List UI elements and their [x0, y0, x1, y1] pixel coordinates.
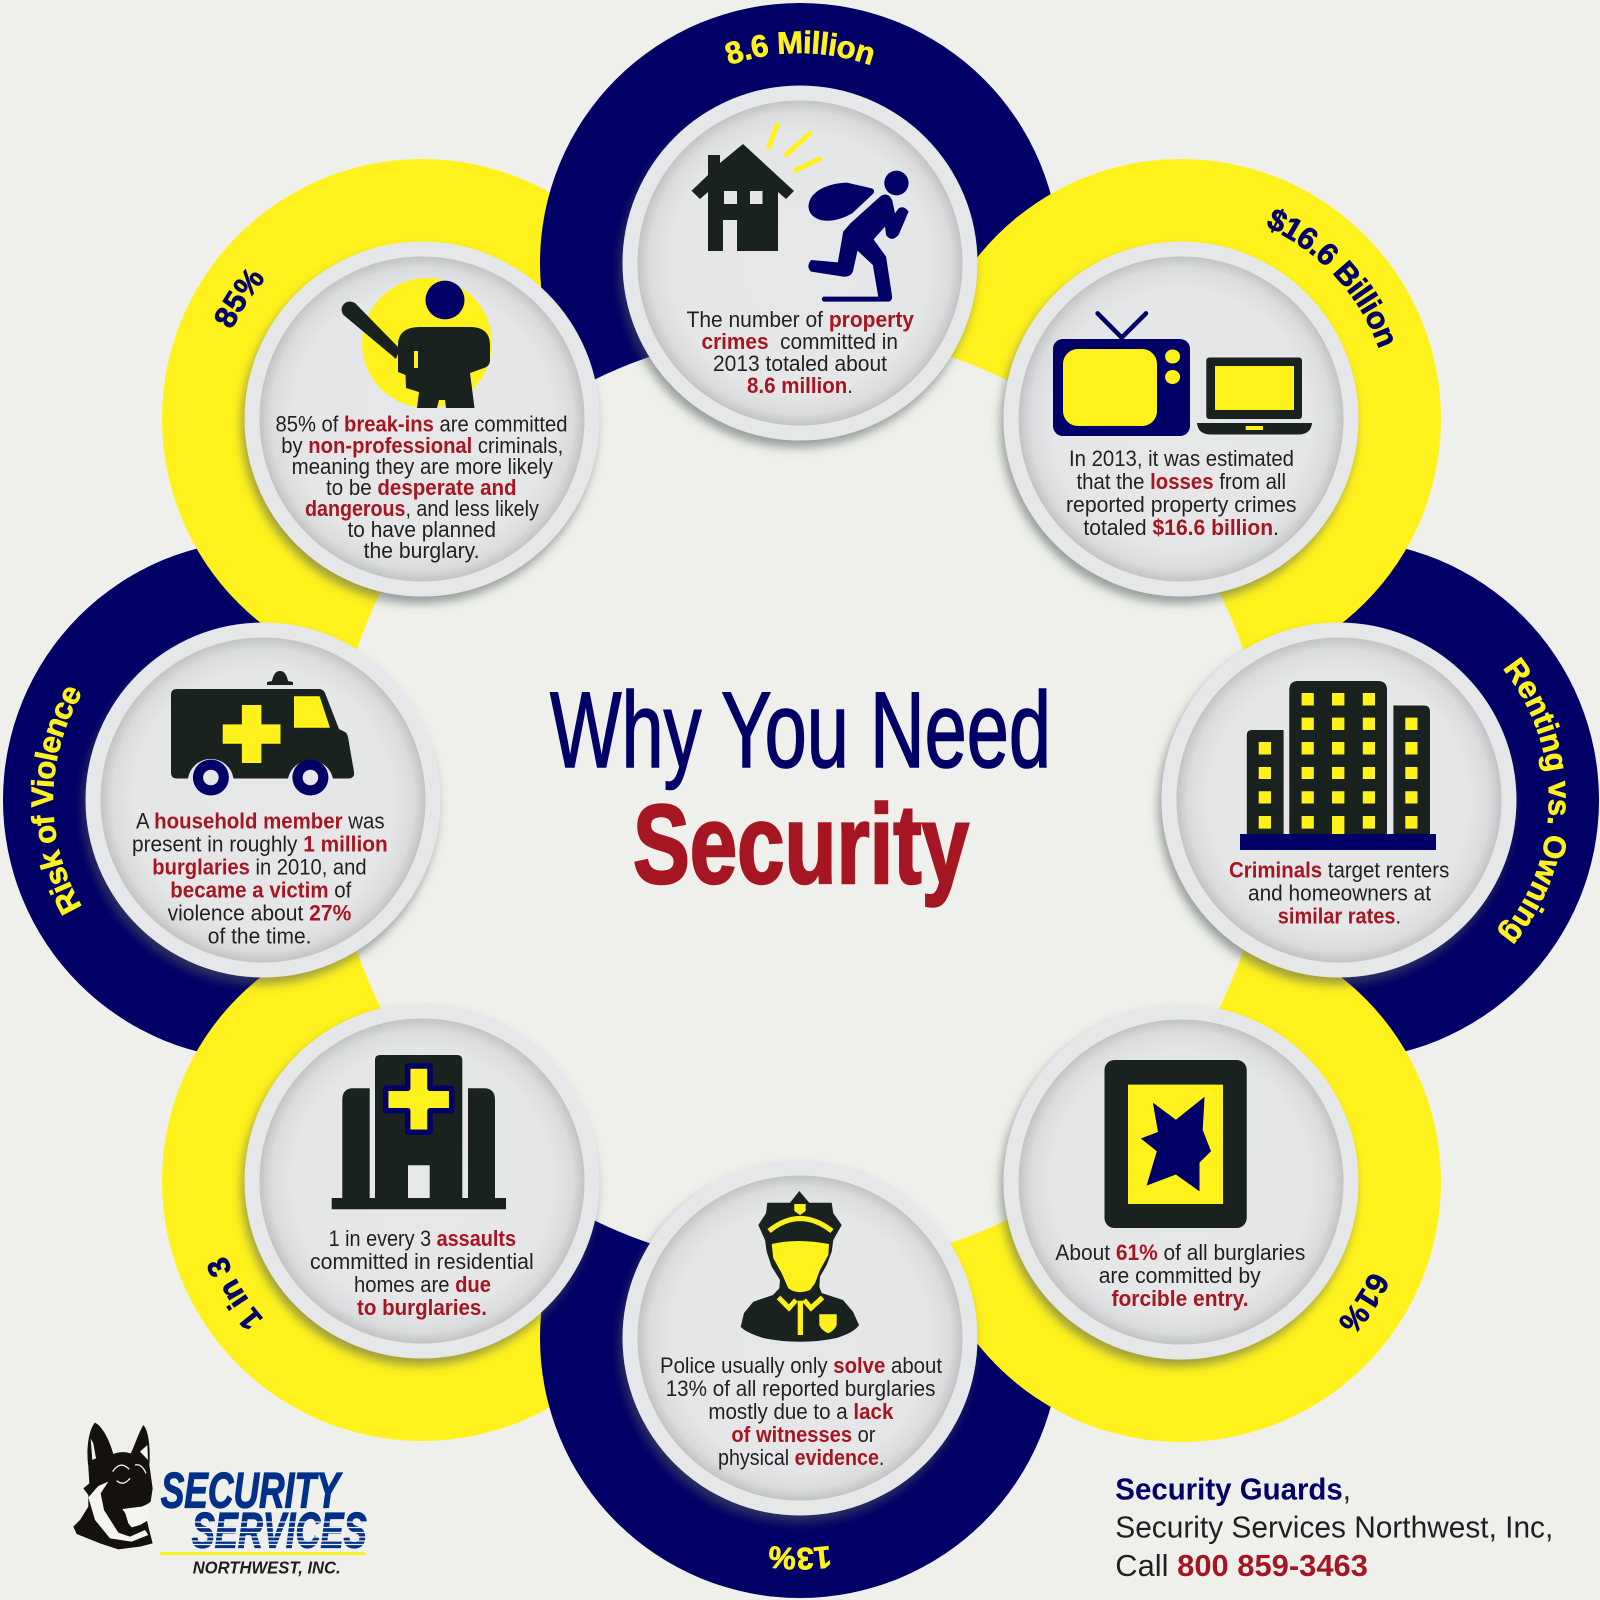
title [550, 669, 1051, 907]
text: non-professional criminals: meaning they are more likely [292, 454, 553, 479]
text: police solve rate: Police usually only solve about [660, 1353, 942, 1378]
text: assaults [310, 1226, 534, 1320]
text: assaults: homes are due [354, 1272, 491, 1297]
label: $16.6 Billion: $16.6 Billion [1267, 208, 1393, 348]
logo word: SECURITY: SECURITY [161, 1463, 343, 1519]
logo word: NORTHWEST, INC.: NORTHWEST, INC. [193, 1557, 341, 1577]
icon: police officer [741, 1191, 859, 1342]
text: risk of violence: of the time. [208, 924, 312, 948]
text: risk of violence: present in roughly 1 million [132, 832, 388, 856]
contact text: Call 800 859-3463 [1115, 1548, 1368, 1583]
text: police solve rate: mostly due to a lack [708, 1399, 894, 1424]
text: assaults: committed in residential [310, 1249, 534, 1274]
text: renting vs owning [1229, 858, 1449, 928]
text: non-professional criminals: the burglary. [364, 538, 480, 563]
label: Renting vs. Owning: Renting vs. Owning [1498, 656, 1566, 944]
text: non-professional criminals: dangerous, and less likely [305, 496, 539, 521]
text: property crimes: The number of property [686, 307, 915, 332]
icon: buildings [1240, 681, 1436, 850]
text: losses: reported property crimes [1066, 492, 1296, 517]
text: forcible entry: are committed by [1099, 1263, 1261, 1288]
text: losses: that the losses from all [1076, 469, 1286, 494]
icon: hospital [332, 1055, 506, 1209]
panel: renting vs owning [1162, 622, 1516, 978]
text: property crimes: 8.6 million. [747, 373, 853, 398]
text: renting vs owning: similar rates. [1278, 904, 1401, 928]
text: property crimes: 2013 totaled about [713, 351, 887, 376]
label: 85%: 85% [214, 268, 264, 328]
logo word: SERVICES [185, 1503, 370, 1559]
contact text [1115, 1472, 1553, 1583]
text: losses [1066, 446, 1296, 540]
text: risk of violence [132, 808, 388, 948]
text: non-professional criminals: 85% of break-ins are committed [276, 412, 568, 436]
contact text: Security Services Northwest, Inc, [1115, 1510, 1553, 1545]
panel: losses [1004, 242, 1358, 596]
panel: property crimes [622, 86, 978, 440]
text: losses: In 2013, it was estimated [1069, 446, 1294, 471]
text: non-professional criminals [276, 412, 568, 563]
label: Risk of Violence: Risk of Violence [30, 687, 82, 916]
text: police solve rate: physical evidence. [718, 1445, 884, 1470]
text: risk of violence: became a victim of [170, 878, 352, 902]
label: 61%: 61% [1340, 1274, 1388, 1332]
text: property crimes: crimes committed in [702, 329, 898, 354]
label: 8.6 Million: 8.6 Million [725, 30, 874, 66]
text: risk of violence: burglaries in 2010, and [152, 854, 367, 880]
icon: ambulance [171, 671, 354, 796]
text: assaults: 1 in every 3 assaults [329, 1226, 516, 1251]
title: Why You Need [550, 669, 1051, 790]
panel: assaults [244, 1004, 600, 1358]
contact text: Security Guards, [1115, 1472, 1351, 1506]
icon: alarm rays [768, 123, 821, 171]
panel: police solve rate [622, 1160, 978, 1516]
label: 1 in 3: 1 in 3 [208, 1258, 263, 1330]
text: assaults: to burglaries. [357, 1295, 487, 1320]
text: renting vs owning: and homeowners at [1248, 880, 1431, 906]
text: property crimes [686, 307, 915, 398]
central background circle [332, 332, 1268, 1268]
panel: non-professional criminals [244, 242, 600, 596]
text: police solve rate: of witnesses or [731, 1422, 876, 1447]
icon: german shepherd [73, 1423, 153, 1549]
icon: burglar [808, 171, 909, 302]
title: Security [633, 782, 969, 907]
text: forcible entry: forcible entry. [1112, 1286, 1249, 1311]
text: forcible entry [1055, 1240, 1305, 1311]
text: risk of violence: A household member was [136, 808, 385, 834]
icon: man with bat [342, 278, 492, 408]
icon: laptop [1197, 358, 1312, 434]
text: police solve rate: 13% of all reported burglaries [666, 1376, 936, 1401]
icon: house [692, 144, 794, 251]
icon: television [1053, 313, 1190, 436]
panel: risk of violence [86, 622, 440, 978]
logo word: SERVICES: SERVICES [192, 1503, 367, 1559]
text: forcible entry: About 61% of all burglaries [1055, 1240, 1305, 1265]
panel: forcible entry [1004, 1004, 1358, 1360]
text: risk of violence: violence about 27% [168, 900, 351, 926]
text: police solve rate [660, 1353, 942, 1470]
text: renting vs owning: Criminals target renters [1229, 858, 1449, 882]
text: losses: totaled $16.6 billion. [1083, 515, 1279, 540]
text: non-professional criminals: to be desperate and [326, 475, 517, 500]
text: non-professional criminals: by non-professional criminals, [281, 433, 563, 458]
logo: Security Services Northwest [73, 1423, 370, 1577]
icon: broken window [1104, 1060, 1247, 1228]
label: 13%: 13% [769, 1546, 830, 1570]
text: non-professional criminals: to have planned [348, 517, 496, 542]
